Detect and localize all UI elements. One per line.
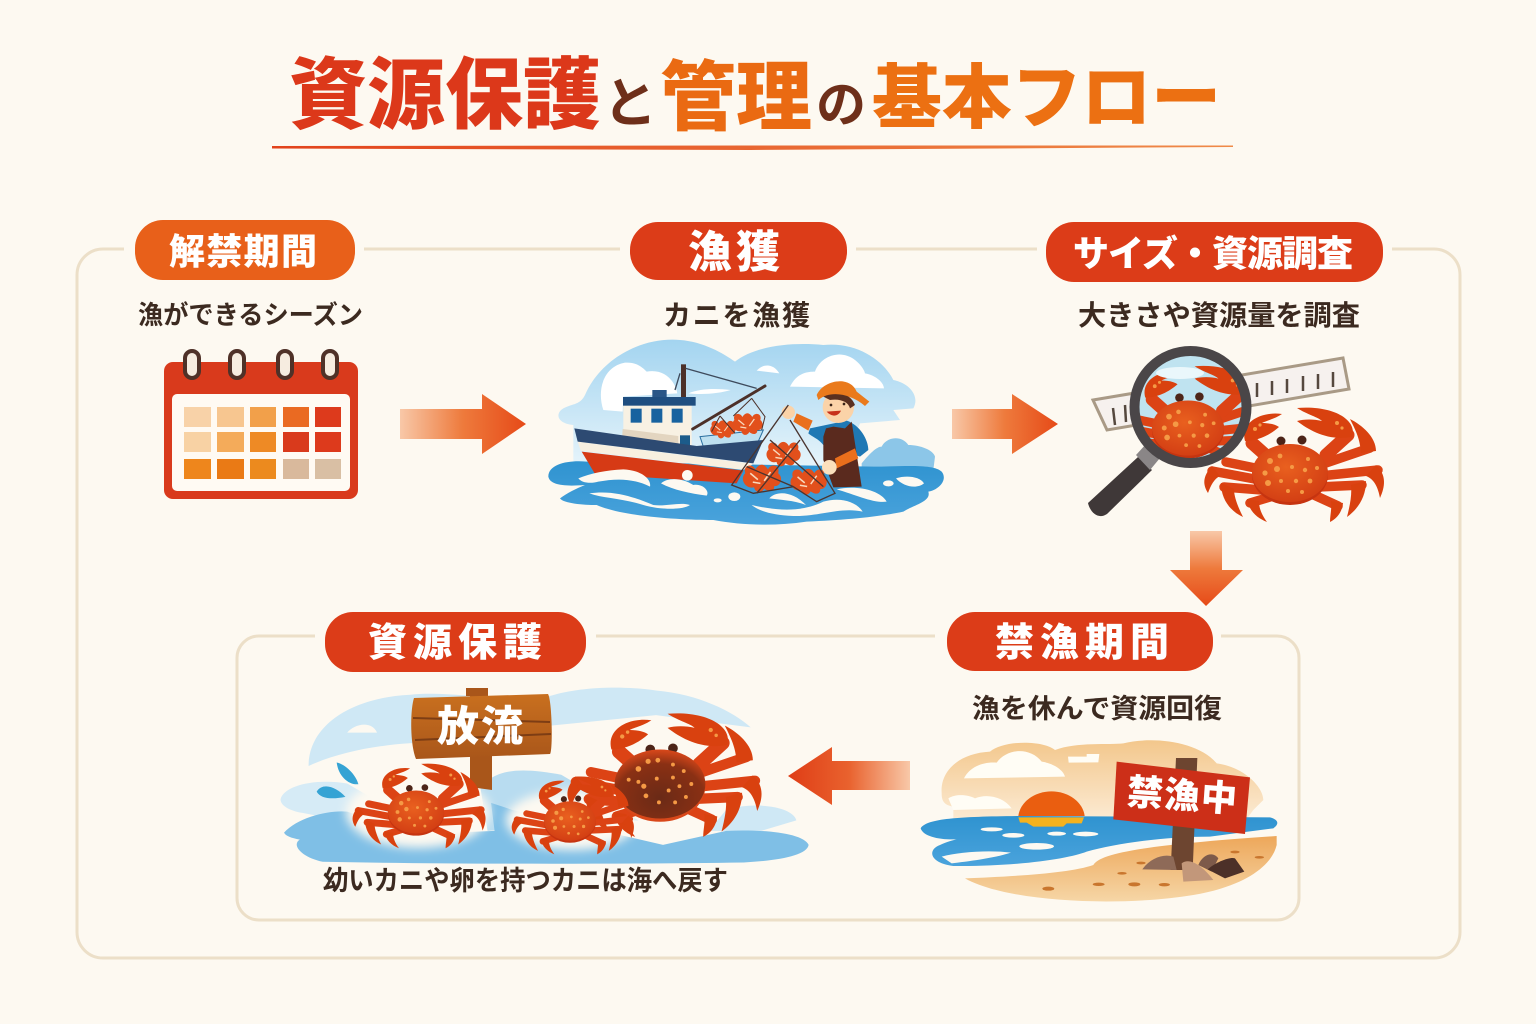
- sand dots: [1042, 851, 1264, 891]
- water back: [548, 461, 944, 525]
- net with crabs: [732, 405, 835, 502]
- sun: [1018, 791, 1085, 816]
- sign text: 放流: 放流: [437, 703, 523, 750]
- fisherman: [782, 381, 869, 487]
- title: 管理: [660, 56, 812, 141]
- pill: 漁獲: 漁獲: [688, 228, 780, 277]
- sky: [558, 340, 915, 470]
- pill: 禁漁期間: [947, 612, 1213, 671]
- rocks: [1142, 854, 1244, 882]
- illustration: fishing boat and fisherman: [548, 340, 944, 525]
- pill: 資源保護: 資源保護: [368, 622, 542, 665]
- arrow: catch to survey: [952, 394, 1058, 454]
- sea: [921, 816, 1277, 866]
- magnifier handle: [1088, 444, 1160, 516]
- crab C: [567, 713, 762, 837]
- pill: サイズ・資源調査: [1046, 222, 1383, 282]
- wave highlights: [942, 827, 1098, 863]
- title: 資源保護: [289, 51, 601, 139]
- clouds: [601, 355, 884, 412]
- wooden sign post: [466, 688, 492, 790]
- right blue wave: [862, 438, 935, 473]
- arrow: calendar to catch: [400, 394, 526, 454]
- crab B: [512, 777, 634, 854]
- pill: 解禁期間: [135, 220, 355, 280]
- illustration: ruler, magnifier and crabs: [1088, 351, 1384, 522]
- pill: 資源保護: [325, 612, 586, 672]
- tan sky: [942, 740, 1263, 823]
- sky and water: [281, 688, 809, 864]
- arrow: closed season to protection: [788, 747, 910, 805]
- label: 大きさや資源量を調査: 大きさや資源量を調査: [1078, 300, 1360, 331]
- title: 基本フロー: [872, 59, 1221, 137]
- title: と: [603, 74, 657, 134]
- foam waves: [578, 469, 924, 516]
- wooden sign board: [411, 694, 552, 759]
- label: 漁ができるシーズン: 漁ができるシーズン: [138, 300, 363, 330]
- pill: 禁漁期間: 禁漁期間: [995, 622, 1169, 665]
- ruler: [1093, 358, 1349, 430]
- outer flow frame: [77, 249, 1460, 958]
- title: の: [816, 77, 866, 133]
- label: 漁を休んで資源回復: 漁を休んで資源回復: [972, 694, 1222, 724]
- magnifier lens: [1130, 346, 1252, 468]
- pill: 解禁期間: 解禁期間: [169, 231, 317, 272]
- label: カニを漁獲: カニを漁獲: [663, 300, 810, 331]
- crab A: [353, 764, 486, 848]
- sign post: [1171, 758, 1197, 870]
- beach: [965, 836, 1277, 901]
- icon: calendar: [164, 351, 358, 499]
- title: [289, 51, 1221, 141]
- pill: サイズ・資源調査: サイズ・資源調査: [1073, 233, 1353, 274]
- illustration: releasing crabs: [281, 688, 809, 864]
- sign text: 禁漁中: 禁漁中: [1126, 771, 1238, 820]
- inner flow frame: [237, 636, 1299, 920]
- clouds: [948, 751, 1099, 810]
- frame gaps behind pills: [124, 240, 1392, 644]
- foam halo behind small crabs: [346, 776, 638, 850]
- large crab: [1204, 408, 1384, 522]
- sun reflection: [1018, 817, 1084, 827]
- sign board: [1113, 762, 1250, 834]
- boat: [574, 364, 765, 483]
- arrow: survey to closed season: [1170, 531, 1243, 606]
- label: 幼いカニや卵を持つカニは海へ戻す: 幼いカニや卵を持つカニは海へ戻す: [323, 866, 728, 896]
- title underline: [272, 146, 1233, 150]
- pill: 漁獲: [630, 222, 847, 280]
- sign plank lines: [413, 718, 551, 740]
- illustration: closed season beach: [921, 740, 1277, 901]
- hanging net crabs: [710, 398, 765, 438]
